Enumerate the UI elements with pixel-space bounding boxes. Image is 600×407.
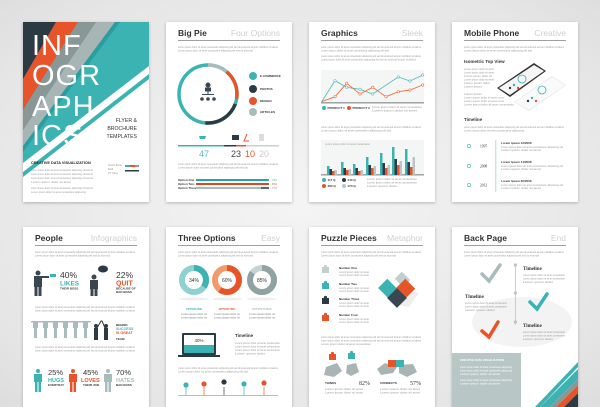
page: back page: Lorem ipsum dolor (465, 308, 495, 312)
option bars: 65% (272, 183, 278, 186)
line legend: PRODUCT 2 (352, 106, 370, 110)
timeline: Lorem ipsum dolor sit amet (501, 148, 541, 152)
numbers: 20 (259, 149, 269, 159)
page: back page: Lorem ipsum dolor (523, 337, 553, 341)
small icons row (199, 134, 264, 141)
option bars: Option Three (178, 186, 197, 190)
subheading: Isometric Top View (464, 59, 505, 64)
intro text: Lorem ipsum dolor sit amet consectetur adipiscing elit sed do eiusmod (178, 254, 254, 258)
timeline block: Lorem ipsum dolor sit amet consectetur (235, 348, 280, 352)
stat: likes: LIKES (60, 280, 80, 288)
gray info box (452, 353, 521, 407)
timeline heading: Timeline (464, 117, 483, 122)
page: people (23, 227, 149, 407)
bar legend: Lorem ipsum dolor sit amet consectetur (367, 180, 417, 184)
intro text: Lorem ipsum dolor sit amet consectetur adipiscing elit sed do eiusmod (321, 254, 397, 258)
stat: quit: BAD BOSS (116, 290, 132, 294)
legend icons: E-COMMERCE (260, 74, 281, 78)
intro text: Lorem ipsum dolor sit amet consectetur adipiscing elit sed do eiusmod tempor incididunt ut labore (178, 45, 278, 49)
heading (464, 233, 566, 246)
vertical timeline (514, 263, 517, 325)
bottom stats: LOVES (81, 378, 100, 384)
page: graphics (309, 22, 435, 202)
timeline text (464, 125, 564, 132)
legend icons: PHOTOS (260, 87, 273, 91)
timeline: Lorem ipsum dolor sit amet consectetur adipiscing elit (501, 164, 563, 168)
heading (464, 28, 566, 41)
puzzle list: Lorem ipsum dolor sit amet (339, 273, 369, 277)
timeline text: Lorem ipsum dolor sit amet consectetur adipiscing (464, 128, 525, 132)
intro text (464, 250, 564, 258)
text: Lorem ipsum dolor sit amet consectetur (321, 342, 371, 346)
donuts: 60% (222, 278, 233, 284)
numbers: 47 (199, 149, 209, 159)
page: back page: Lorem ipsum dolor sit amet consectetur (465, 304, 507, 308)
side text: Lorem ipsum dolor sit amet (464, 78, 494, 82)
side text: Lorem ipsum (464, 92, 482, 96)
heading: Big Pie (178, 28, 207, 38)
bottom stats: 70% (116, 368, 131, 377)
text: Lorem ipsum dolor sit amet consectetur adipiscing elit sed do eiusmod tempor incididunt ut labore (321, 338, 421, 342)
cover title (32, 30, 101, 152)
line legend: Lorem ipsum dolor sit amet consectetur (372, 105, 422, 109)
gray info box: Lorem ipsum dolor sit amet consectetur adipiscing (460, 368, 512, 372)
heading (321, 28, 424, 41)
corner stripes (535, 362, 578, 407)
timeline block: Lorem ipsum dolor (235, 352, 265, 356)
side text: Lorem ipsum dolor sit amet cons (464, 96, 505, 100)
timeline: 2008 (480, 164, 487, 168)
text: Lorem ipsum dolor sit amet consectetur adipiscing elit sed do eiusmod tempor incididunt ut labore (178, 366, 278, 370)
text: Lorem ipsum dolor sit amet consectetur adipiscing elit sed do eiusmod tempor incididunt ut labore (35, 305, 135, 309)
cover text: Lorem ipsum dolor sit amet consectetur adipiscing (31, 190, 87, 194)
intro text: Lorem ipsum dolor sit amet consectetur adipiscing elit sed do eiusmod tempor incididunt ut labore (464, 250, 564, 254)
stat: likes: THEIR BOSS (60, 286, 78, 290)
intro text: Lorem ipsum dolor sit amet consectetur adipiscing elit sed (464, 48, 533, 52)
text (178, 162, 278, 170)
laptop (178, 333, 220, 357)
gray info box: Lorem ipsum dolor sit amet (460, 382, 500, 386)
heading: Back Page (464, 233, 507, 243)
text (178, 366, 278, 374)
team row: IS GREAT (116, 331, 134, 335)
cover text: Lorem ipsum dolor sit amet consectetur adipiscing elit sed do (31, 168, 93, 172)
stat: quit (90, 266, 136, 296)
page: back page: Lorem ipsum dolor sit amet consectetur (465, 301, 507, 305)
heading: Infographics (91, 233, 137, 243)
puzzle list: Lorem ipsum dolor sit amet (339, 270, 369, 274)
option labels (181, 307, 275, 320)
cover stripes art (23, 22, 149, 177)
heading (321, 233, 423, 246)
page: back page: Lorem ipsum dolor (523, 280, 553, 284)
puzzle list: Lorem ipsum dolor sit amet (339, 304, 369, 308)
intro text (321, 250, 421, 258)
timeline labels (465, 267, 543, 329)
cover text: Lorem ipsum dolor sit amet (31, 180, 71, 184)
intro text: Lorem ipsum dolor sit amet consectetur adipiscing elit sed do eiusmod tempor incididunt ut labore (321, 54, 421, 58)
donut chart (167, 53, 249, 135)
timeline: Lorem Ipsum 30/2006 (501, 179, 532, 183)
text (35, 305, 135, 312)
thinks graphic: THINKS (325, 381, 336, 385)
timeline: Lorem Ipsum 14/2008 (501, 160, 532, 164)
bottom text: Lorem ipsum dolor sit amet (325, 390, 363, 394)
intro text: Lorem ipsum dolor sit amet consectetur adipiscing elit sed (321, 48, 390, 52)
page: back page (452, 227, 578, 407)
bar chart: Lorem ipsum dolor sit amet consectetur (325, 142, 370, 146)
cover title: INF (32, 30, 82, 62)
side text (464, 67, 514, 106)
bar chart (321, 140, 424, 175)
subtitle: FLYER & (116, 118, 138, 124)
donuts: 85% (257, 278, 268, 284)
intro text: Lorem ipsum dolor sit amet consectetur adipiscing elit sed do eiusmod tempor incididunt (321, 58, 416, 62)
heading: Creative (534, 28, 566, 38)
subtitle: BROCHURE (107, 126, 138, 132)
text: Lorem ipsum dolor sit amet consectetur adipiscing elit sed do (178, 166, 249, 170)
timeline: 2012 (480, 184, 487, 188)
gray info box: Lorem ipsum dolor sit amet (460, 372, 500, 376)
donuts (179, 268, 277, 300)
option labels: OPTION ONE (186, 307, 202, 311)
bottom stats: 25% (48, 368, 63, 377)
text: Lorem ipsum dolor sit amet consectetur adipiscing elit sed (178, 370, 249, 374)
bottom stats: 45% (83, 368, 98, 377)
heading: Four Options (231, 28, 280, 38)
intro text (321, 45, 421, 62)
option bars: 74% (272, 179, 278, 182)
cover text: Lorem ipsum dolor sit amet consectetur adipiscing elit sed do (31, 172, 93, 176)
intro text (178, 45, 278, 52)
text: Lorem ipsum dolor sit amet consectetur adipiscing elit sed do eiusmod tempor incididunt ut labore (35, 308, 135, 312)
option labels: OPTION TWO (219, 307, 235, 311)
intro text: Lorem ipsum dolor sit amet consectetur adipiscing elit sed do eiusmod tempor incididunt ut labore (178, 250, 278, 254)
option bars: Option One (178, 178, 195, 182)
legend icons: DESIGN (260, 99, 272, 103)
intro text: Lorem ipsum dolor sit amet consectetur adipiscing elit sed do eiusmod tempor incididunt ut labore (464, 45, 564, 49)
line legend: PRODUCT 1 (328, 106, 345, 110)
intro text: Lorem ipsum dolor sit amet consectetur adipiscing elit sed do eiusmod tempor incididunt ut labore (35, 250, 135, 254)
side text: Lorem ipsum dolor sit amet (464, 67, 494, 71)
text: Lorem ipsum dolor sit amet consectetur adipiscing elit sed (321, 128, 392, 132)
bottom stats: HUGS (48, 378, 64, 384)
cover legend: PT Sans (108, 171, 119, 175)
heading: Sleek (402, 28, 424, 38)
legend icons: ARTICLES (260, 110, 275, 114)
puzzle list: Number One (339, 266, 357, 270)
numbers (199, 149, 269, 159)
pin timeline (178, 379, 278, 396)
bar legend: 470 Q (348, 184, 356, 188)
option bars (178, 178, 278, 190)
option labels: Lorem ipsum dolor sit (181, 316, 207, 320)
intro text (464, 45, 564, 52)
page: big pie (166, 22, 292, 202)
intro text (35, 250, 135, 258)
team row: TEAM (116, 337, 125, 341)
bar legend: 380 Q (328, 184, 336, 188)
side text: Lorem ipsum (464, 84, 482, 88)
laptop: 40% (194, 338, 204, 343)
heading (35, 233, 137, 246)
option labels: Lorem ipsum dolor sit (249, 316, 275, 320)
intro text: Lorem ipsum dolor sit amet consectetur adipiscing elit sed do eiusmod tempor incididunt ut labore (321, 250, 421, 254)
option labels: Lorem ipsum dolor sit (214, 312, 240, 316)
icon: org chart (200, 82, 216, 101)
thinks graphic (324, 351, 370, 387)
timeline labels: Timeline (523, 267, 543, 272)
cover heading: CREATIVE DATA VISUALIZATION (31, 161, 91, 165)
page: puzzle pieces (309, 227, 435, 407)
timeline (467, 140, 563, 192)
timeline: 1997 (480, 144, 487, 148)
heading: Graphics (321, 28, 358, 38)
numbers: 23 (231, 149, 241, 159)
bar legend (322, 177, 417, 188)
bottom stats: HATES (116, 378, 135, 384)
option labels: Lorem ipsum dolor sit (249, 312, 275, 316)
cover text: Lorem ipsum dolor sit amet consectetur adipiscing elit sed do (31, 186, 93, 190)
option bars: Option Two (178, 182, 194, 186)
stat: quit: QUIT (116, 280, 133, 288)
bottom text: Lorem ipsum dolor sit amet (380, 390, 420, 394)
option bars: 21% (272, 187, 278, 190)
heading: Easy (261, 233, 281, 243)
stat: likes: 40% (60, 270, 77, 280)
team row: SUCCESS (116, 327, 134, 331)
donuts: 34% (189, 278, 200, 284)
bar legend: 240 Q (348, 178, 356, 182)
thinks graphic: 82% (359, 381, 370, 387)
puzzle list: Lorem ipsum dolor sit amet (339, 320, 369, 324)
bottom stats: EVERYDAY (48, 383, 64, 387)
timeline: Lorem ipsum dolor sit amet (501, 186, 541, 190)
intro text: Lorem ipsum dolor sit amet consectetur adipiscing elit sed do eiusmod (35, 254, 111, 258)
line legend: Lorem ipsum dolor sit amet (372, 108, 417, 112)
stat: quit: 22% (116, 270, 133, 280)
timeline block: Lorem ipsum dolor sit amet consectetur (235, 341, 280, 345)
heading (178, 28, 280, 41)
intro text: Lorem ipsum dolor sit amet consectetur adipiscing elit sed do eiusmod (178, 48, 254, 52)
connects graphic: CONNECTS (380, 381, 397, 385)
phones illustration (497, 63, 566, 111)
connects graphic (377, 360, 421, 387)
timeline labels: Timeline (523, 324, 543, 329)
gray info box: Lorem ipsum dolor sit amet consectetur adipiscing (460, 365, 512, 369)
option labels: OPTION THREE (252, 307, 272, 311)
text (35, 345, 135, 352)
timeline block: Timeline (235, 333, 254, 338)
side text: Lorem ipsum dolor sit amet (464, 70, 494, 74)
timeline block: Lorem ipsum dolor sit amet consectetur (235, 344, 280, 348)
line chart (321, 70, 424, 103)
text: Lorem ipsum dolor sit amet consectetur adipiscing elit sed do eiusmod tempor incididunt ut labore (178, 162, 278, 166)
heading: Mobile Phone (464, 28, 520, 38)
page: back page: Lorem ipsum dolor sit amet consectetur (523, 273, 565, 277)
cover title: APH (32, 91, 95, 123)
text (321, 125, 421, 132)
progress bar (178, 145, 279, 146)
heading: Three Options (178, 233, 236, 243)
bottom stats: BAD BOSS (116, 383, 132, 387)
heading: Metaphor (387, 233, 423, 243)
cover title: OGR (32, 60, 101, 92)
text: Lorem ipsum dolor sit amet consectetur adipiscing elit sed do eiusmod tempor incididunt ut labore (321, 335, 421, 339)
page: back page: Lorem ipsum dolor sit amet consectetur (523, 276, 565, 280)
cover legend (108, 163, 139, 175)
side text: Lorem ipsum dolor sit amet consectetur (464, 102, 514, 106)
timeline: Lorem ipsum dolor sit amet (501, 167, 541, 171)
timeline block (235, 333, 280, 356)
timeline labels: Timeline (465, 295, 485, 300)
timeline: Lorem ipsum dolor sit amet consectetur adipiscing elit (501, 145, 563, 149)
bar legend: 117 Q (328, 178, 336, 182)
page: cover (23, 22, 149, 202)
bottom text (325, 387, 420, 394)
side text: Lorem ipsum dolor sit amet cons (464, 99, 505, 103)
page: mobile phone (452, 22, 578, 202)
numbers: 10 (245, 149, 255, 159)
puzzle list: Number Four (339, 313, 359, 317)
puzzle list (322, 265, 369, 324)
team row: BEHIND (116, 323, 128, 327)
puzzle list: Number Three (339, 297, 360, 301)
line legend (322, 105, 422, 112)
option labels: Lorem ipsum dolor sit (181, 312, 207, 316)
text: Lorem ipsum dolor sit amet consectetur adipiscing elit sed do eiusmod tempor incididunt ut labore (321, 125, 421, 129)
option labels: Lorem ipsum dolor sit (214, 316, 240, 320)
connects graphic: 57% (410, 381, 421, 387)
world map faint (472, 297, 572, 347)
bottom stats (34, 368, 135, 392)
subtitle: TEMPLATES (107, 134, 138, 140)
puzzle list: Lorem ipsum dolor sit amet (339, 301, 369, 305)
side text: Lorem ipsum dolor sit (464, 74, 492, 78)
cover legend: Rustic Book (108, 163, 123, 167)
heading: End (551, 233, 566, 243)
page: back page: Lorem ipsum dolor sit amet consectetur (523, 334, 565, 338)
text: Lorem ipsum dolor sit amet consectetur adipiscing elit sed do eiusmod tempor incididunt ut labore (35, 345, 135, 349)
intro text: Lorem ipsum dolor sit amet consectetur adipiscing elit sed do eiusmod (464, 254, 540, 258)
puzzle list: Number Two (339, 282, 357, 286)
timeline: Lorem ipsum dolor sit amet consectetur adipiscing elit (501, 183, 563, 187)
checkmarks (482, 265, 547, 337)
puzzle list: Lorem ipsum dolor sit amet (339, 286, 369, 290)
legend icons (249, 72, 281, 116)
gray info box: Lorem ipsum dolor sit amet consectetur adipiscing (460, 378, 512, 382)
bottom text: Lorem ipsum dolor sit amet (380, 387, 420, 391)
subtitle (107, 118, 138, 140)
puzzle list: Lorem ipsum dolor sit amet (339, 317, 369, 321)
heading (178, 233, 281, 246)
bar legend: Lorem ipsum dolor (367, 184, 397, 188)
text: Lorem ipsum dolor sit amet consectetur adipiscing elit sed do eiusmod tempor incididunt ut labore (35, 348, 135, 352)
intro text (178, 250, 278, 258)
bar legend: Lorem ipsum dolor sit amet consectetur (367, 177, 417, 181)
text (321, 335, 421, 346)
stat: likes (34, 270, 80, 296)
team row (31, 321, 134, 341)
gray info box: CREATIVE DATA VISUALIZATION (460, 358, 504, 362)
page: back page: Lorem ipsum dolor sit amet consectetur (523, 330, 565, 334)
cover legend: Bold (108, 167, 114, 171)
cover text: Lorem ipsum dolor sit amet consectetur adipiscing elit sed do (31, 176, 93, 180)
big puzzle (378, 272, 419, 308)
page: three options (166, 227, 292, 407)
heading: Puzzle Pieces (321, 233, 377, 243)
intro text: Lorem ipsum dolor sit amet consectetur adipiscing elit sed do eiusmod tempor incididunt ut labore (321, 45, 421, 49)
cover title: ICS (32, 120, 83, 152)
timeline: Lorem Ipsum 12/2006 (501, 141, 532, 145)
heading: People (35, 233, 63, 243)
bottom stats: THEIR JOB (83, 383, 100, 387)
puzzle list: Lorem ipsum dolor sit amet (339, 289, 369, 293)
side text: Lorem ipsum dolor (464, 81, 490, 85)
stat: quit: BECAUSE OF (116, 286, 136, 290)
cover text (31, 168, 93, 194)
bottom text: Lorem ipsum dolor sit amet (325, 387, 363, 391)
timeline text: Lorem ipsum dolor sit amet consectetur adipiscing elit sed do eiusmod tempor incididunt ut labore (464, 125, 564, 129)
